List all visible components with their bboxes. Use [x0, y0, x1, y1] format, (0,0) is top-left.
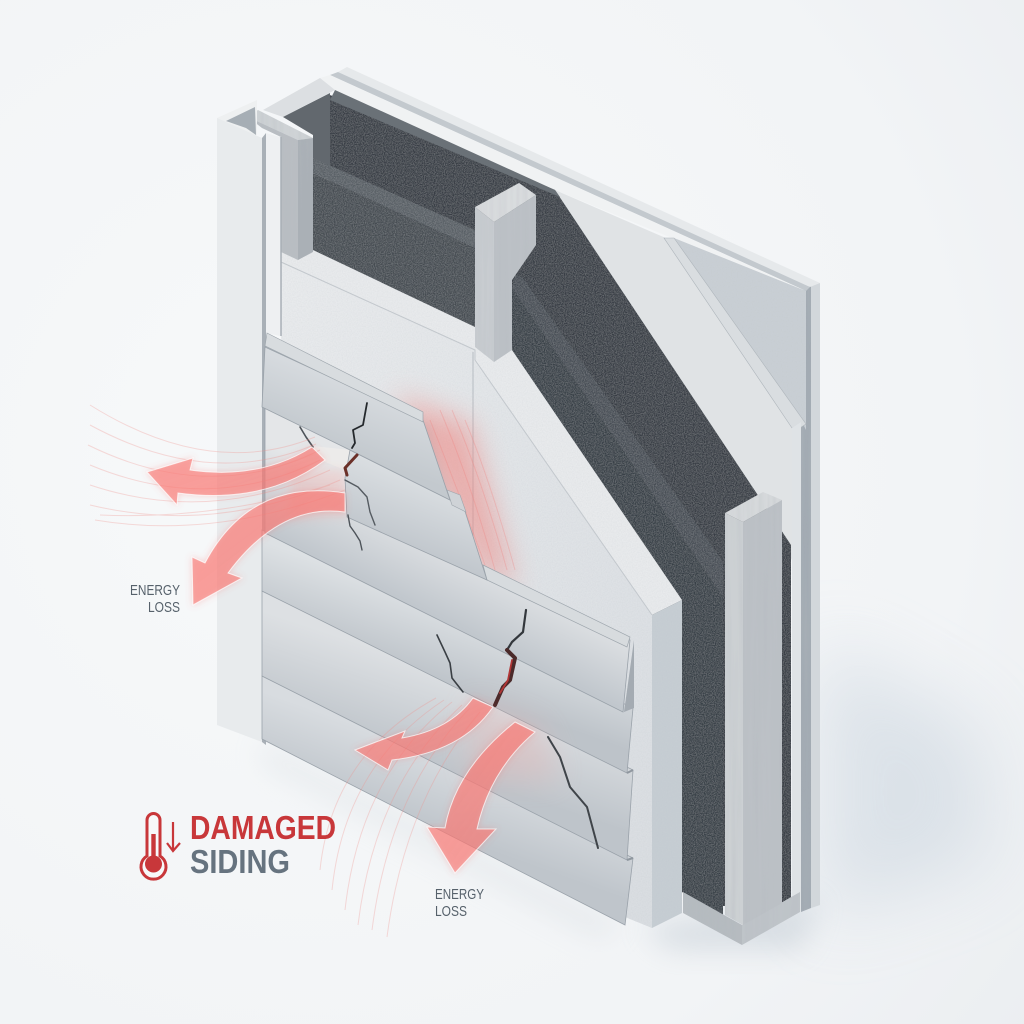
- bottom plate: [683, 892, 800, 945]
- arrows: [147, 447, 535, 873]
- white foam board: [262, 250, 682, 928]
- label: energy loss bottom: ENERGY: [435, 886, 484, 903]
- label: energy loss left: ENERGY: [130, 582, 180, 599]
- title: [190, 809, 336, 880]
- board row 4: [262, 676, 633, 925]
- cavity side wall: [283, 93, 330, 170]
- label: energy loss left: [130, 582, 180, 616]
- red heat glow on foam: [395, 395, 515, 590]
- board row 3: [262, 591, 633, 860]
- siding boards: [262, 333, 634, 925]
- pink wash by damage: [290, 470, 348, 520]
- foam top: [281, 250, 682, 615]
- board row 1: [265, 405, 634, 712]
- crack: upper main: [352, 403, 367, 448]
- top cut board: [262, 333, 450, 500]
- upper left waves: [90, 405, 315, 453]
- crack: lower main: [437, 635, 463, 692]
- drywall panel: [555, 190, 792, 560]
- lower waves: [320, 698, 480, 937]
- foam front: [262, 262, 652, 928]
- front dark foam: [512, 275, 723, 916]
- right edges shadow: [627, 770, 633, 860]
- label: energy loss left: LOSS: [148, 599, 180, 616]
- arrow: upper left: [147, 447, 325, 505]
- back panel grey: [674, 238, 806, 430]
- light strip: [792, 422, 801, 897]
- back board outer edge: [792, 283, 820, 912]
- gouge pale tab: [312, 446, 357, 470]
- cracks: [300, 403, 598, 848]
- stud: left: [248, 110, 313, 260]
- arrow: lower left: [192, 491, 345, 605]
- back board top bands: [263, 67, 820, 291]
- middle foam board: [313, 158, 475, 330]
- upper cut board: [345, 450, 487, 580]
- wall assembly: [217, 67, 820, 945]
- foam side: [652, 600, 682, 928]
- arrow: bottom left: [355, 698, 493, 770]
- shadow above siding: [265, 345, 450, 500]
- cavity lip: [330, 90, 560, 197]
- label: energy loss bottom: LOSS: [435, 903, 467, 920]
- stud: centre: [475, 183, 536, 362]
- floor shadow: [262, 640, 990, 950]
- icon: thermometer with down arrow: [141, 814, 180, 879]
- board row 2: [262, 530, 633, 773]
- corner channel: [217, 100, 281, 745]
- label: energy loss bottom: [435, 886, 484, 920]
- title: DAMAGED: [190, 809, 336, 846]
- stud: right: [725, 492, 782, 925]
- heat wave lines: [88, 405, 480, 937]
- arrow: bottom down: [427, 722, 535, 873]
- back dark insulation: [330, 95, 791, 906]
- title: SIDING: [190, 843, 290, 880]
- drywall bevel: [664, 238, 806, 428]
